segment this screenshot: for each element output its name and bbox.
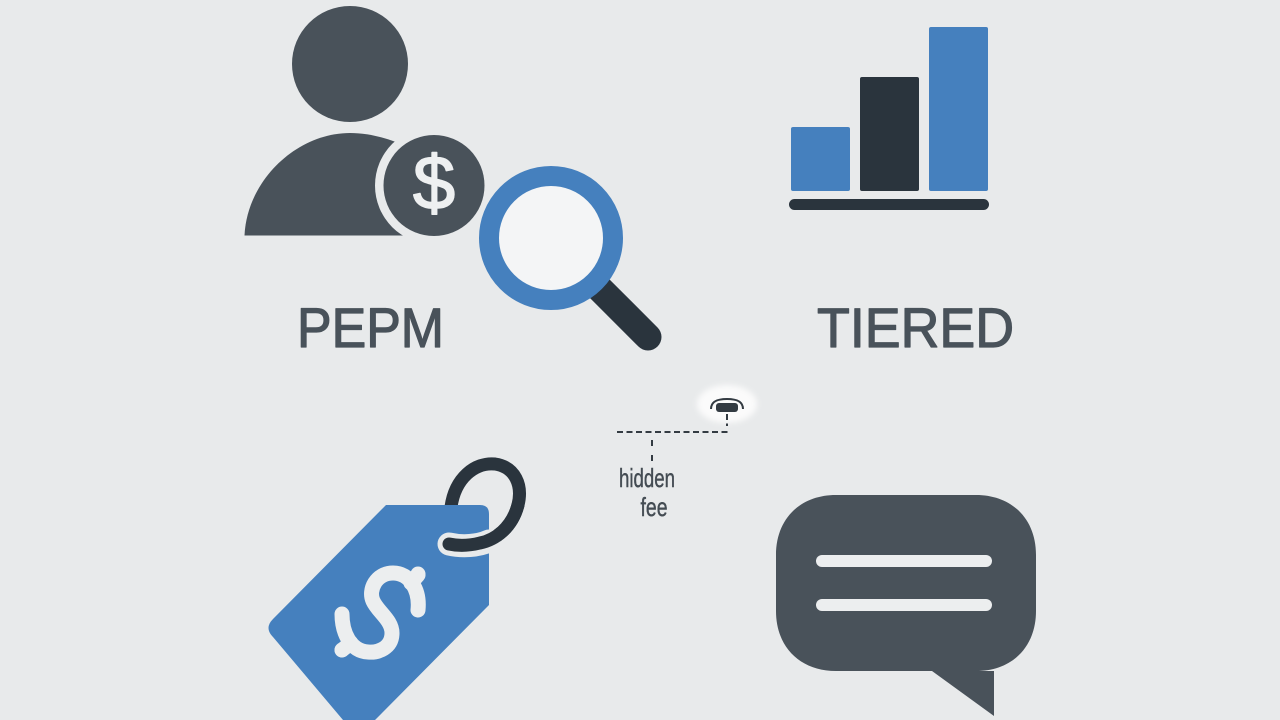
bubble body bbox=[776, 495, 1036, 716]
ring front bbox=[449, 505, 518, 545]
icon: magnifying glass bbox=[489, 176, 648, 337]
ring back bbox=[451, 464, 519, 543]
bar: high bbox=[929, 27, 988, 191]
text: hidden fee: fee bbox=[640, 492, 668, 522]
icon: speech bubble bbox=[776, 495, 1036, 716]
coin bbox=[375, 126, 493, 244]
text line 1 bbox=[816, 555, 992, 567]
label: TIERED: TIERED bbox=[817, 296, 1014, 359]
dollar sign: $ bbox=[413, 141, 455, 226]
bar: middle bbox=[860, 77, 919, 191]
dollar sign on tag bbox=[342, 573, 418, 652]
handle bbox=[598, 287, 648, 337]
person head bbox=[292, 6, 408, 122]
icon: tiered bar chart bbox=[789, 27, 989, 210]
icon: hidden fee callout bbox=[617, 385, 757, 522]
dollar stem dots bbox=[334, 566, 426, 658]
baseline bbox=[789, 199, 989, 210]
text: hidden fee: hidden bbox=[619, 463, 675, 493]
icon: person with dollar coin bbox=[244, 6, 493, 244]
tag body bbox=[268, 505, 489, 720]
lens bbox=[489, 176, 613, 300]
icon: price tag bbox=[268, 464, 519, 720]
text line 2 bbox=[816, 599, 992, 611]
tag hole bbox=[449, 541, 489, 546]
small glyph bbox=[711, 399, 743, 412]
glow badge bbox=[697, 385, 757, 423]
bar: low bbox=[791, 127, 850, 191]
label: PEPM: PEPM bbox=[297, 296, 444, 359]
person shoulders bbox=[244, 133, 420, 236]
dashed connector bbox=[617, 414, 728, 461]
